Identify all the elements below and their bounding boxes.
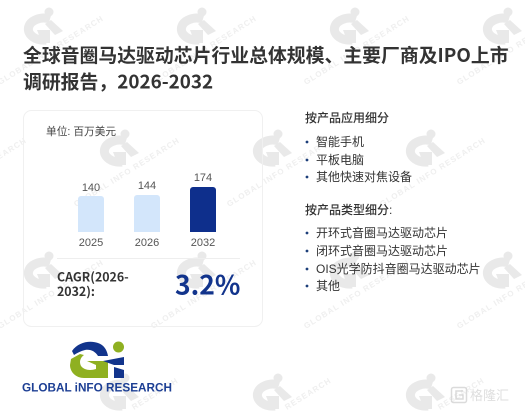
background watermark pattern: GLOBAL INFO RESEARCH (302, 258, 411, 331)
application segments (305, 110, 412, 184)
title: 调研报告，2026-2032 (23, 68, 213, 94)
application segments: 按产品应用细分 (305, 110, 389, 125)
source watermark badge (452, 388, 509, 403)
product type segments: OIS光学防抖音圈马达驱动芯片 (316, 261, 481, 276)
background watermark pattern: GLOBAL INFO RESEARCH (378, 136, 487, 209)
CAGR label: CAGR(2026- (57, 268, 129, 286)
background watermark pattern: GLOBAL INFO RESEARCH (149, 14, 258, 87)
application segments: 智能手机 (316, 134, 364, 149)
unit label: 单位: 百万美元 (46, 125, 116, 138)
application segments: 平板电脑 (316, 153, 364, 167)
title: 全球音圈马达驱动芯片行业总体规模、主要厂商及IPO上市 (23, 41, 509, 68)
product type segments: 按产品类型细分: (305, 202, 392, 217)
bar chart: 2025 (79, 237, 103, 249)
logo: Global Info Research (22, 342, 172, 394)
product type segments: 闭环式音圈马达驱动芯片 (316, 243, 448, 258)
product type segments (305, 202, 481, 293)
bar chart: 144 (138, 180, 156, 192)
background watermark pattern: GLOBAL INFO RESEARCH (225, 136, 334, 209)
background watermark pattern: RESEARCH (436, 376, 485, 412)
background watermark pattern: RESEARCH (283, 376, 332, 412)
CAGR value: 3.2% (175, 264, 240, 302)
background watermark pattern: RESEARCH (130, 376, 179, 412)
product type segments: 其他 (316, 279, 340, 293)
bar chart: 174 (194, 172, 212, 184)
background watermark pattern: GLOBAL INFO RESEARCH (72, 136, 181, 209)
bar chart: 2026 (135, 237, 159, 249)
bar chart (78, 172, 216, 249)
background watermark pattern: GLOBAL INFO RESEARCH (302, 14, 411, 87)
source watermark badge: 格隆汇 (470, 388, 509, 403)
panel: market size card (24, 110, 262, 326)
bar chart: 2032 (191, 237, 215, 249)
background watermark pattern: GLOBAL INFO RESEARCH (149, 258, 258, 331)
CAGR label: 2032): (57, 282, 95, 300)
logo: Global Info Research: GLOBAL iNFO RESEARCH (22, 380, 172, 394)
product type segments: 开环式音圈马达驱动芯片 (316, 225, 448, 240)
application segments: 其他快速对焦设备 (316, 170, 412, 184)
bar chart: 140 (82, 182, 100, 194)
